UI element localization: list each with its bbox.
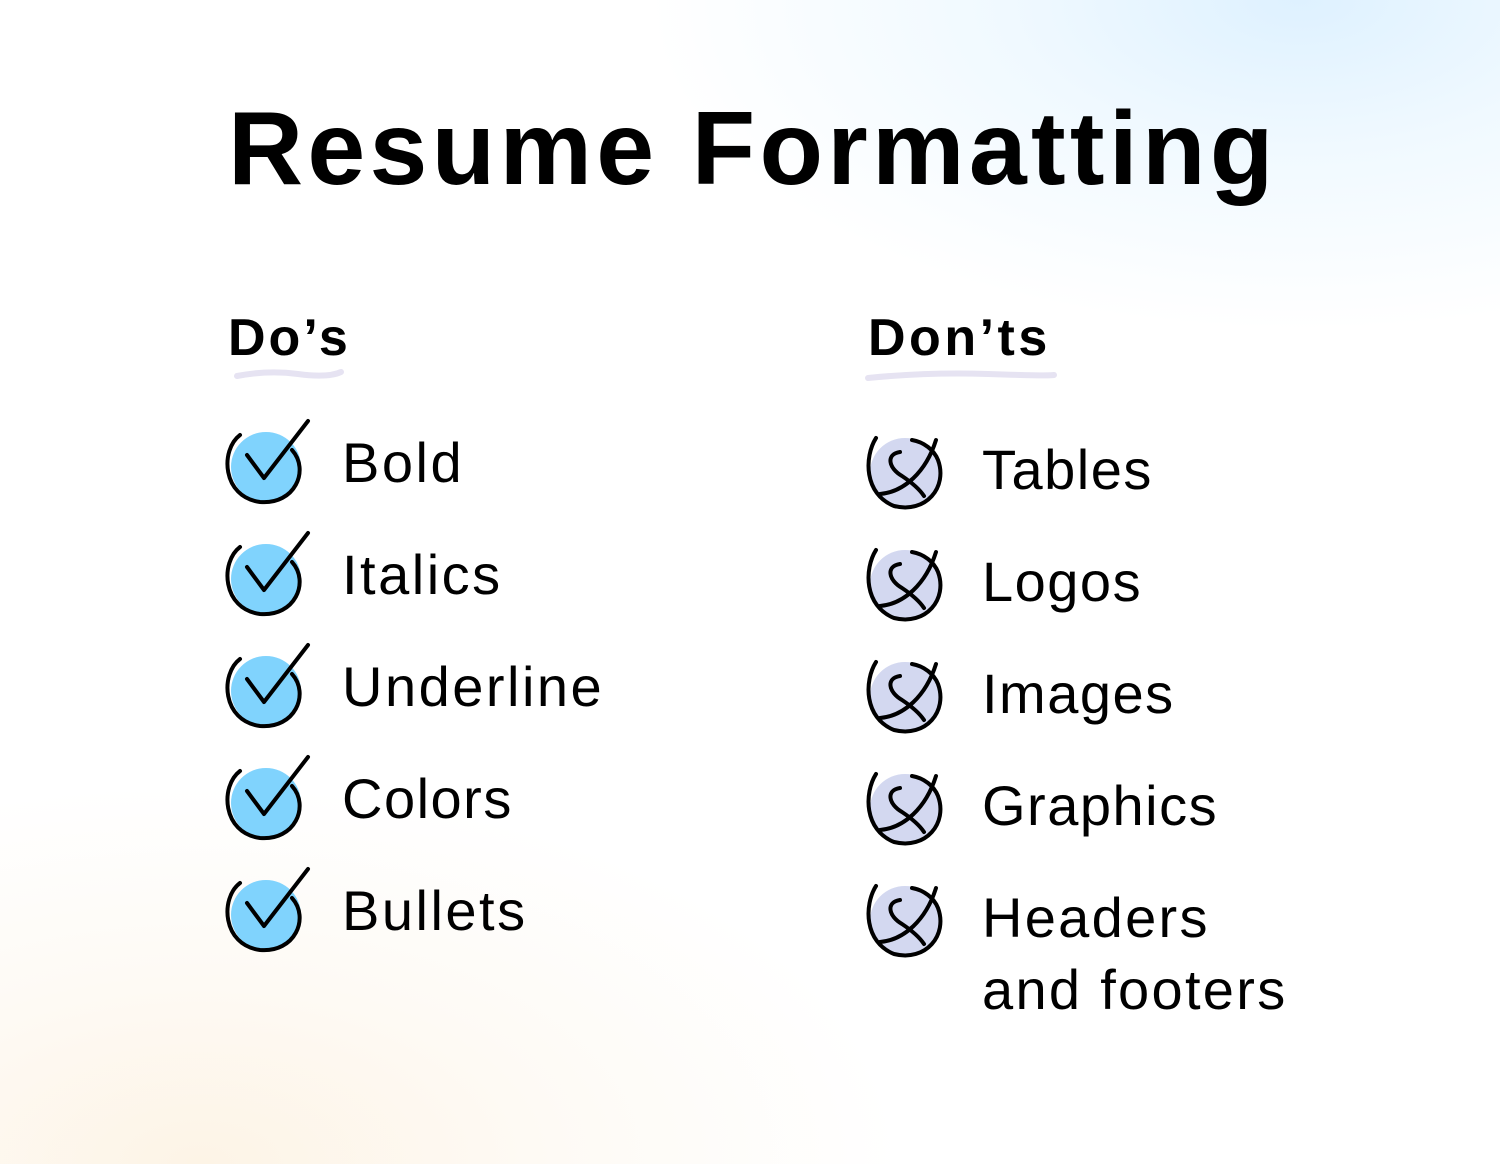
item: italics [225,530,503,616]
item: images: Images [982,662,1175,725]
title: Resume Formatting [228,91,1278,207]
item: tables: Tables [982,438,1153,501]
item: images [866,660,1175,734]
item: headers and footers: Headers [982,886,1210,949]
item: underline [225,642,604,728]
item: bold [225,418,464,504]
item: bullets: Bullets [342,879,528,942]
item: graphics: Graphics [982,774,1218,837]
list: do's [225,418,604,952]
heading: don'ts: Don’ts [868,309,1051,367]
item: headers and footers: and footers [982,958,1288,1021]
heading: do's: Do’s [228,309,351,367]
item: logos [866,548,1142,622]
item: tables [866,436,1153,510]
item: colors: Colors [342,767,513,830]
item: bold: Bold [342,431,464,494]
item: graphics [866,772,1218,846]
item: italics: Italics [342,543,503,606]
item: logos: Logos [982,550,1142,613]
list: don'ts [866,436,1288,1021]
item: colors [225,754,513,840]
item: underline: Underline [342,655,604,718]
item: headers and footers [866,884,1288,1021]
item: bullets [225,866,528,952]
